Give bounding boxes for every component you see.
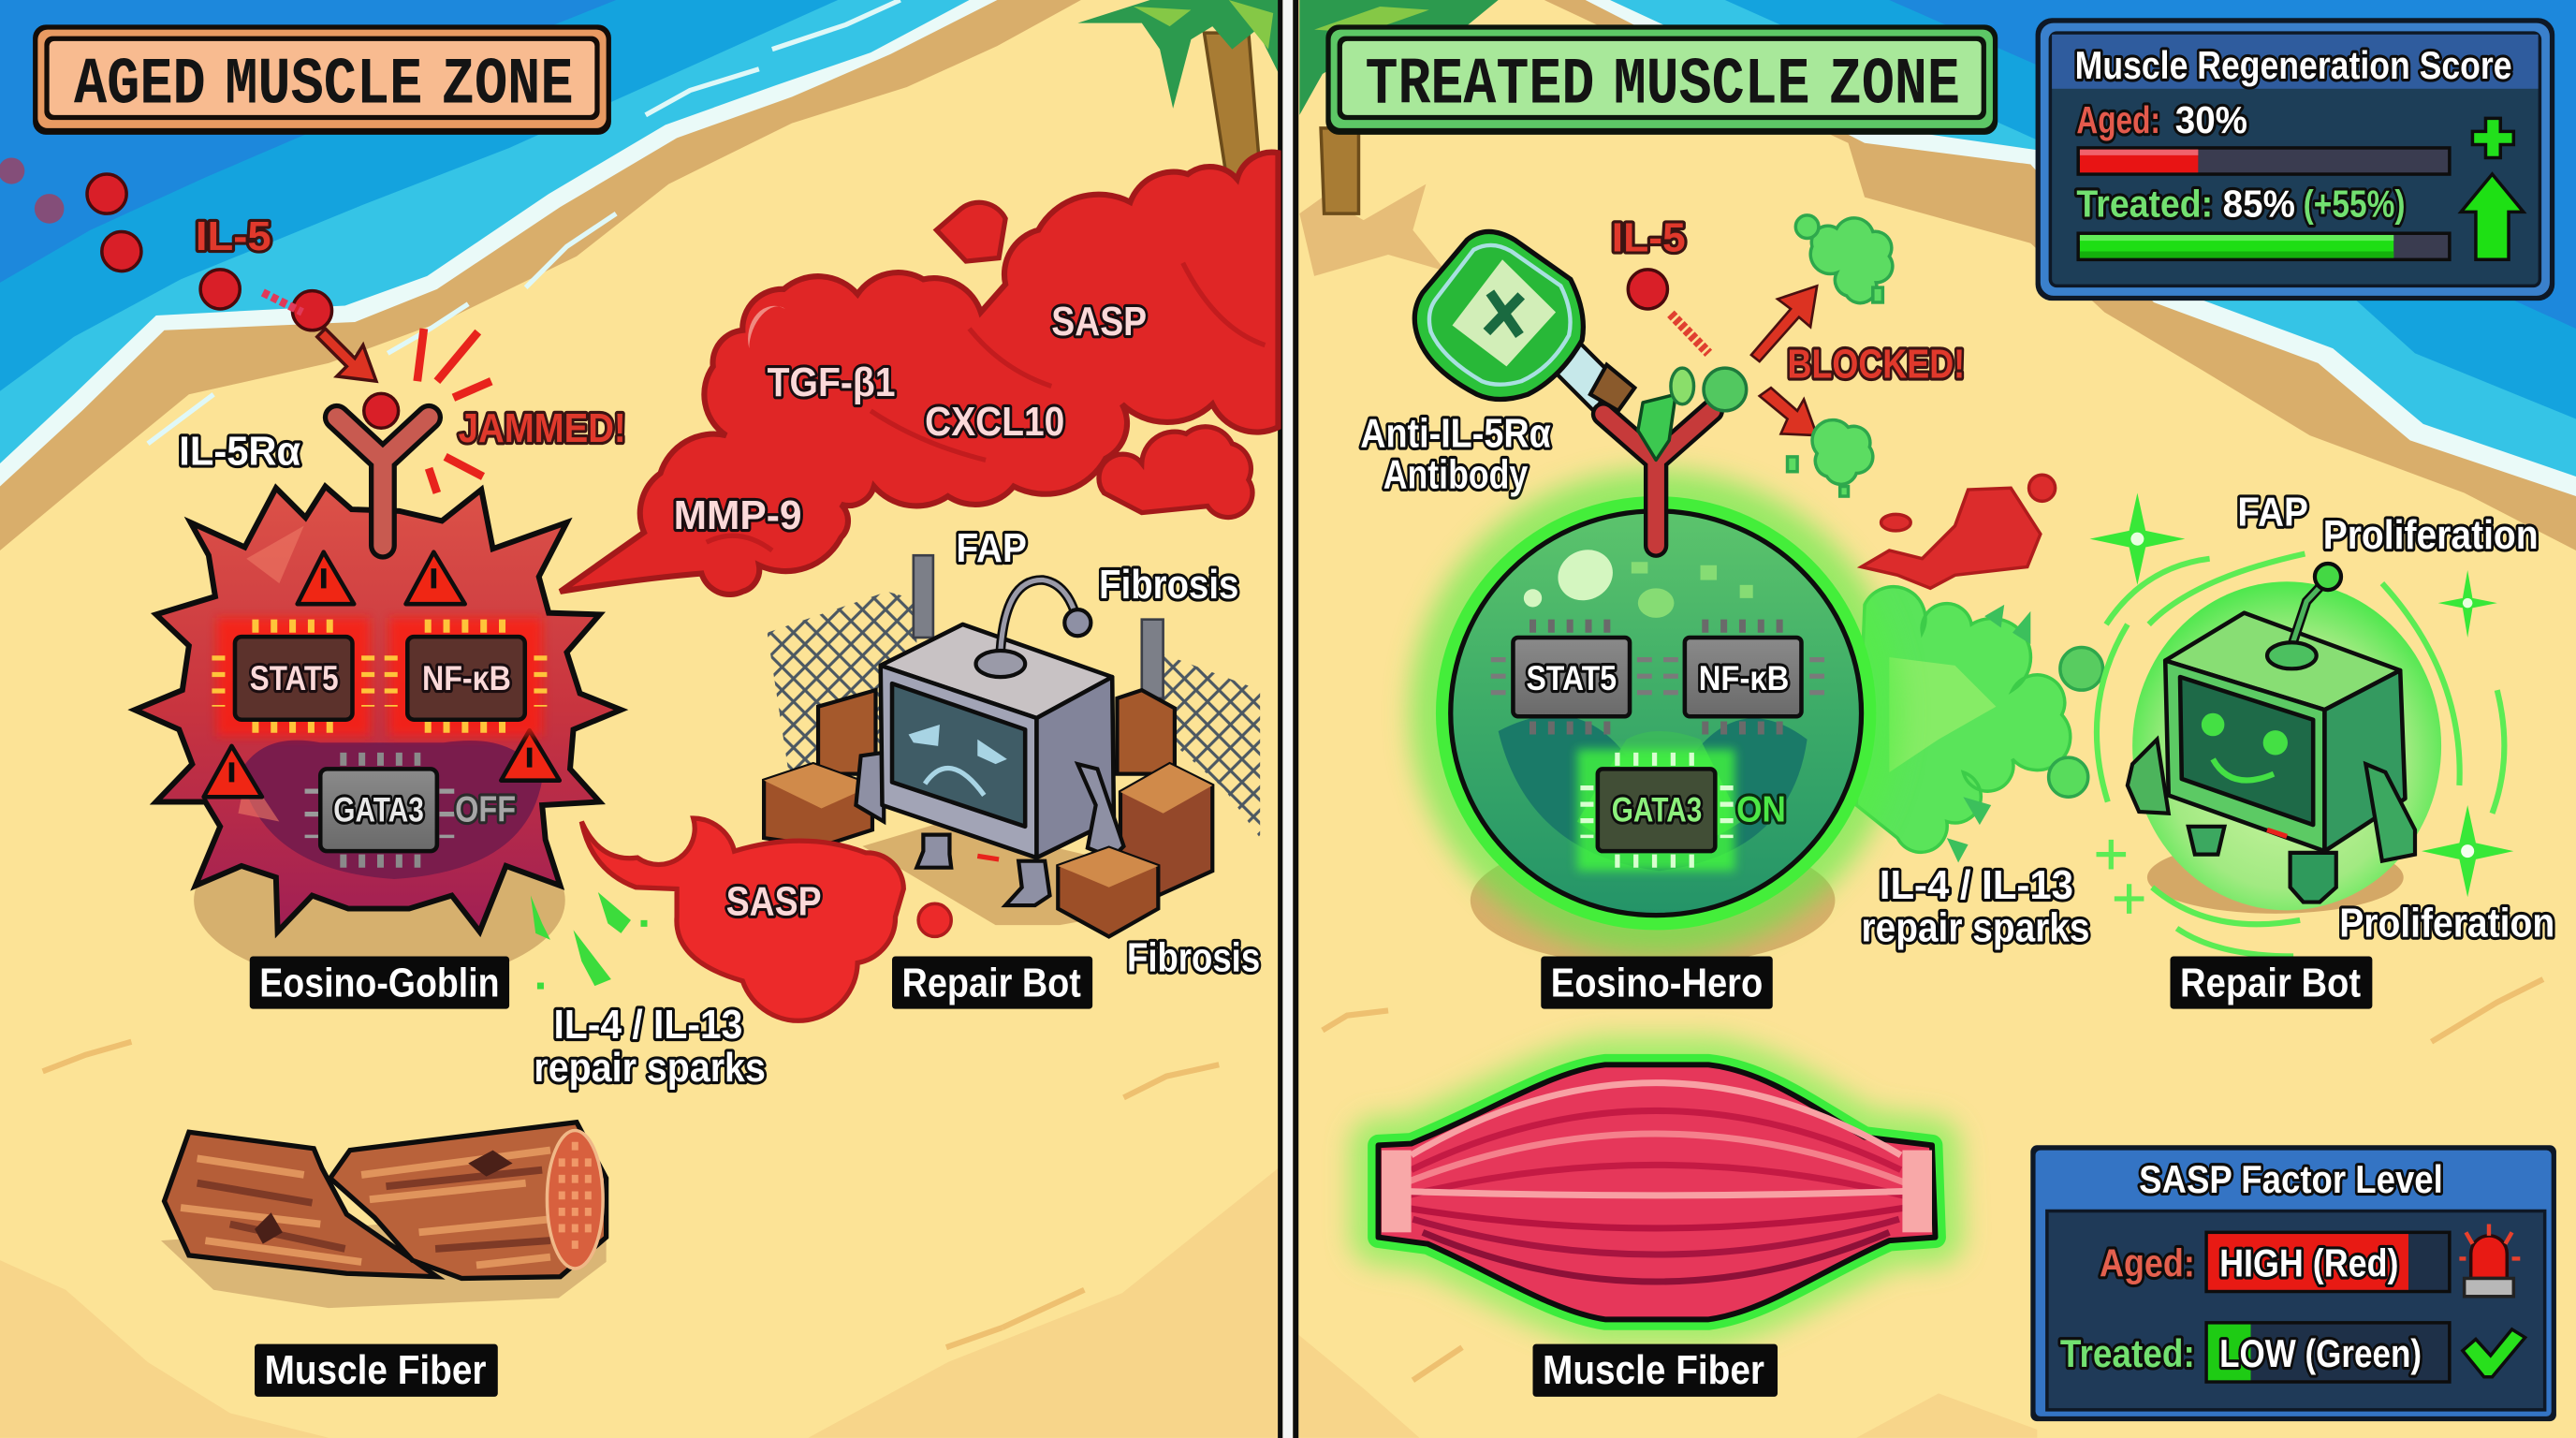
proliferation label top: Proliferation — [2323, 512, 2539, 558]
right palm tree — [1299, 0, 1499, 276]
jammed label: JAMMED! — [459, 405, 626, 451]
antibody bottle — [1414, 231, 1634, 411]
il-4 / il-13 label aged — [534, 1002, 766, 1091]
chip: gata3 off — [312, 759, 516, 861]
il-5 molecule treated — [1628, 270, 1667, 309]
fap label treated: FAP — [2237, 490, 2308, 536]
goblin shadow — [194, 815, 565, 986]
warning icon — [204, 746, 262, 797]
aged bar — [2076, 146, 2452, 176]
chip: nf-kb: NF-κB — [422, 659, 511, 697]
robot arm — [856, 753, 884, 822]
chip: gata3 on: GATA3 — [1612, 791, 1702, 829]
receptor: blocked on hero — [1603, 368, 1747, 546]
il-5 bound to receptor — [364, 393, 399, 428]
antibody on receptor — [1638, 394, 1676, 460]
hero shadow — [1471, 835, 1835, 966]
chip: gata3 on: ON — [1736, 790, 1786, 830]
treated score: (+55%) — [2304, 183, 2405, 226]
deflect arrow down — [1760, 388, 1817, 435]
chip: nf-kb treated — [1671, 626, 1817, 728]
brick — [764, 764, 872, 846]
muscle fiber label treated: Muscle Fiber — [1543, 1347, 1764, 1393]
il-5 label treated: IL-5 — [1612, 215, 1686, 261]
robot right arm — [1077, 764, 1123, 858]
sasp factor panel — [2030, 1145, 2556, 1421]
red sasp residue — [1862, 475, 2056, 588]
bot leg — [2291, 853, 2336, 902]
warning icon — [406, 552, 465, 604]
title text: AGED MUSCLE ZONE — [74, 50, 574, 124]
repair bot label treated: Repair Bot — [2180, 960, 2361, 1005]
eosino-hero label: Eosino-Hero — [1551, 960, 1763, 1005]
chip: gata3 on — [1577, 749, 1786, 871]
aged level bar — [2204, 1231, 2452, 1293]
bottle label — [1453, 259, 1556, 366]
robot antenna — [976, 580, 1090, 677]
repair bot label aged: Repair Bot — [902, 960, 1081, 1005]
bot antenna — [2267, 564, 2341, 668]
sparkle — [2438, 570, 2497, 638]
log end slice — [547, 1131, 603, 1269]
warning icon — [501, 730, 560, 781]
status led — [2267, 829, 2287, 836]
chip: stat5 — [217, 618, 370, 736]
repair bot treated: healed fap — [2089, 493, 2513, 956]
bot arm right — [2365, 764, 2415, 861]
il-4 / il-13 label treated: repair sparks — [1862, 905, 2089, 951]
treated score: 85% — [2223, 183, 2295, 226]
bot arm left — [2128, 740, 2169, 814]
brick — [1117, 690, 1175, 774]
center divider — [1278, 0, 1298, 1438]
sasp cloud puff — [1099, 427, 1252, 518]
green blocker clumps — [1788, 215, 1893, 496]
receptor: il-5r on goblin — [337, 393, 429, 546]
repair bot aged: fap with fibrosis — [764, 555, 1260, 936]
muscle fiber treated: healthy — [1379, 1064, 1936, 1319]
muscle striations — [1405, 1083, 1906, 1282]
sasp label: SASP — [726, 879, 822, 925]
sparkle — [2089, 493, 2185, 585]
title plaque: treated muscle zone — [1325, 24, 1998, 135]
bot shadow — [2147, 842, 2404, 914]
antibody label: Antibody — [1383, 451, 1529, 497]
aged score: Aged: — [2076, 98, 2160, 141]
panel heading: SASP Factor Level — [2139, 1158, 2443, 1201]
glow spots — [1632, 562, 1753, 618]
log shadow — [161, 1208, 607, 1308]
bot body — [2165, 613, 2405, 851]
sasp droplet — [918, 903, 951, 936]
deflect arrow up — [1751, 286, 1817, 361]
fibrosis fence — [768, 555, 1260, 838]
dashed il-5 path — [1671, 314, 1708, 353]
glow orb — [2132, 581, 2441, 910]
brick — [1120, 764, 1212, 896]
antibody label — [1360, 410, 1551, 497]
proliferation label bottom: Proliferation — [2339, 900, 2554, 946]
il-4 / il-13 label treated: IL-4 / IL-13 — [1880, 862, 2073, 908]
il-4 / il-13 label treated — [1862, 862, 2089, 951]
log right — [330, 1123, 607, 1278]
aged score: 30% — [2175, 98, 2247, 141]
chip: nf-kb treated: NF-κB — [1699, 659, 1789, 697]
chip: nf-kb — [389, 618, 542, 736]
muscle fiber aged: broken log — [161, 1123, 607, 1308]
eosino-goblin label: Eosino-Goblin — [259, 960, 500, 1005]
fibrosis label top: Fibrosis — [1099, 562, 1238, 608]
chip: stat5 treated — [1499, 626, 1645, 728]
repair sparks aged — [531, 892, 648, 990]
title plaque: aged muscle zone — [33, 24, 611, 135]
treated bar — [2076, 231, 2452, 261]
log left — [165, 1132, 437, 1277]
chip: stat5: STAT5 — [250, 659, 339, 697]
muscle fiber label aged: Muscle Fiber — [265, 1347, 487, 1393]
il-4 / il-13 label aged: IL-4 / IL-13 — [553, 1002, 742, 1048]
sand scuff marks — [43, 979, 2543, 1380]
brick — [818, 690, 875, 774]
eosino-goblin cell — [135, 487, 621, 932]
treated label: Treated: — [2060, 1332, 2195, 1375]
treated score: Treated: — [2076, 183, 2213, 226]
aged label: Aged: — [2100, 1242, 2195, 1285]
icon: up arrow — [2461, 174, 2524, 259]
il-4 / il-13 label aged: repair sparks — [534, 1045, 766, 1091]
cloud label: sasp: SASP — [1051, 299, 1147, 345]
right beach ocean — [1544, 0, 2576, 550]
treated level bar — [2204, 1321, 2452, 1384]
chip: gata3 off: GATA3 — [333, 791, 424, 829]
left palm tree — [1077, 0, 1278, 192]
antibody label: Anti-IL-5Rα — [1360, 410, 1551, 456]
title text: TREATED MUSCLE ZONE — [1365, 50, 1960, 124]
il-5 label: IL-5 — [196, 213, 271, 259]
sparkle — [2422, 805, 2513, 897]
blocked label: BLOCKED! — [1788, 342, 1965, 388]
bottle cork — [1590, 365, 1634, 411]
left beach ocean — [0, 0, 1081, 550]
sasp cloud lower — [581, 818, 903, 1020]
score panel: muscle regeneration — [2036, 18, 2554, 301]
arrow: il-5 to receptor — [263, 292, 376, 381]
repair bot shadow — [862, 822, 1134, 925]
highlights — [1524, 541, 1621, 609]
darker sand dunes — [0, 1168, 2037, 1438]
aged score — [2076, 98, 2247, 141]
il-5r alpha label: IL-5Rα — [179, 429, 300, 475]
icon: siren — [2459, 1225, 2520, 1297]
cloud label: tgf-beta1: TGF-β1 — [768, 360, 896, 405]
green cloud: repair sparks — [1856, 587, 2103, 862]
eosino-hero cell — [1410, 470, 1902, 956]
brick — [1058, 848, 1158, 936]
smog cloud: sasp factors — [560, 153, 1278, 594]
il-5 molecules — [0, 157, 332, 330]
cloud label: cxcl10: CXCL10 — [925, 399, 1064, 445]
fap label aged: FAP — [956, 525, 1027, 571]
chip: gata3 off: OFF — [455, 790, 516, 830]
robot body — [881, 624, 1114, 859]
icon: plus — [2472, 118, 2513, 157]
bot face — [2202, 713, 2288, 781]
treated level bar: LOW (Green) — [2219, 1332, 2422, 1375]
icon: check — [2463, 1329, 2525, 1377]
cloud label: mmp-9: MMP-9 — [674, 492, 801, 538]
aged level bar: HIGH (Red) — [2219, 1242, 2398, 1285]
chip: stat5 treated: STAT5 — [1526, 659, 1617, 697]
warning icon — [298, 552, 354, 604]
proliferation rings — [2097, 553, 2504, 956]
jam sparks — [417, 329, 491, 493]
fibrosis label bottom: Fibrosis — [1127, 934, 1260, 980]
robot leg — [916, 835, 951, 868]
bot leg — [2188, 827, 2224, 855]
treated score — [2076, 183, 2405, 226]
sasp cloud puff — [936, 202, 1005, 261]
robot leg — [1005, 861, 1050, 905]
panel heading: Muscle Regeneration Score — [2075, 44, 2512, 87]
